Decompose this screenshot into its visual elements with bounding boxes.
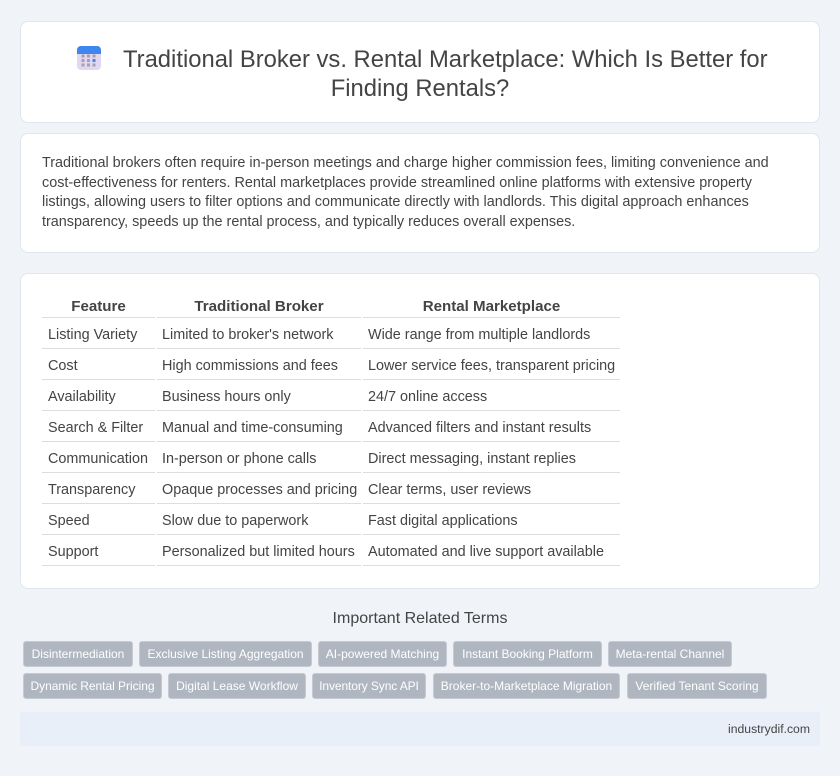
tag bbox=[453, 641, 602, 667]
icon: calendar bbox=[77, 46, 101, 70]
footer bar bbox=[20, 712, 820, 746]
row: search and filter: Manual and time-consuming bbox=[162, 420, 343, 436]
tag bbox=[168, 673, 306, 699]
panel: introduction bbox=[20, 133, 820, 253]
tag bbox=[23, 673, 162, 699]
row: support: Personalized but limited hours bbox=[162, 544, 355, 560]
tag: Digital Lease Workflow bbox=[176, 679, 298, 693]
row: speed: Slow due to paperwork bbox=[162, 513, 308, 529]
comparison table bbox=[42, 298, 620, 566]
row: listing variety: Limited to broker's network bbox=[162, 327, 334, 343]
tag: Meta-rental Channel bbox=[616, 647, 724, 661]
row: listing variety: Wide range from multiple landlords bbox=[368, 327, 590, 343]
row: availability: 24/7 online access bbox=[368, 389, 487, 405]
title: Finding Rentals? bbox=[331, 75, 509, 102]
table header bbox=[71, 298, 560, 315]
heading: related terms: Important Related Terms bbox=[333, 610, 507, 627]
row: search and filter: Advanced filters and instant results bbox=[368, 420, 591, 436]
tag: Disintermediation bbox=[32, 647, 124, 661]
row: transparency: Clear terms, user reviews bbox=[368, 482, 531, 498]
row: transparency: Transparency bbox=[48, 482, 135, 498]
row: speed bbox=[48, 513, 518, 529]
row: search and filter: Search & Filter bbox=[48, 420, 143, 436]
row: availability: Availability bbox=[48, 389, 116, 405]
tag bbox=[23, 641, 133, 667]
intro text: listings, allowing users to filter options and communicate directly with landlords. This digital approach enhances bbox=[42, 194, 749, 210]
tag: Verified Tenant Scoring bbox=[635, 679, 759, 693]
intro text: transparency, speeds up the rental process, and typically reduces overall expenses. bbox=[42, 214, 575, 230]
intro text: cost-effectiveness for renters. Rental marketplaces provide streamlined online platforms with extensive property bbox=[42, 174, 752, 190]
row: transparency: Opaque processes and pricing bbox=[162, 482, 357, 498]
related term tags bbox=[23, 641, 767, 699]
tag: Instant Booking Platform bbox=[462, 647, 593, 661]
footer source text: industrydif.com bbox=[728, 722, 810, 736]
tag bbox=[433, 673, 620, 699]
tag: Exclusive Listing Aggregation bbox=[147, 647, 304, 661]
title bbox=[123, 46, 768, 102]
row: cost bbox=[48, 358, 615, 374]
title: Traditional Broker vs. Rental Marketplace: Which Is Better for bbox=[123, 46, 768, 73]
table header: Rental Marketplace bbox=[423, 298, 560, 315]
panel: comparison table bbox=[20, 273, 820, 589]
tag: Inventory Sync API bbox=[319, 679, 419, 693]
row: support: Automated and live support available bbox=[368, 544, 604, 560]
tag: Broker-to-Marketplace Migration bbox=[441, 679, 612, 693]
row: communication: In-person or phone calls bbox=[162, 451, 316, 467]
row: transparency bbox=[48, 482, 531, 498]
row: listing variety: Listing Variety bbox=[48, 327, 137, 343]
row: support: Support bbox=[48, 544, 98, 560]
tag: Dynamic Rental Pricing bbox=[30, 679, 155, 693]
row: cost: Cost bbox=[48, 358, 78, 374]
table header: Feature bbox=[71, 298, 126, 315]
row: availability: Business hours only bbox=[162, 389, 291, 405]
panel: title card bbox=[20, 21, 820, 123]
row: communication: Direct messaging, instant replies bbox=[368, 451, 576, 467]
row: cost: High commissions and fees bbox=[162, 358, 338, 374]
row: availability bbox=[48, 389, 487, 405]
row: speed: Speed bbox=[48, 513, 90, 529]
tag bbox=[312, 673, 426, 699]
intro text bbox=[42, 155, 769, 230]
row: speed: Fast digital applications bbox=[368, 513, 518, 529]
tag bbox=[318, 641, 447, 667]
tag: AI-powered Matching bbox=[326, 647, 439, 661]
table header: Traditional Broker bbox=[194, 298, 324, 315]
row: communication: Communication bbox=[48, 451, 148, 467]
row: support bbox=[48, 544, 604, 560]
tag bbox=[608, 641, 732, 667]
row: listing variety bbox=[48, 327, 590, 343]
row: search and filter bbox=[48, 420, 591, 436]
intro text: Traditional brokers often require in-person meetings and charge higher commission fees, limiting convenience and bbox=[42, 155, 769, 171]
row: cost: Lower service fees, transparent pricing bbox=[368, 358, 615, 374]
tag bbox=[139, 641, 312, 667]
tag bbox=[627, 673, 767, 699]
row: communication bbox=[48, 451, 576, 467]
